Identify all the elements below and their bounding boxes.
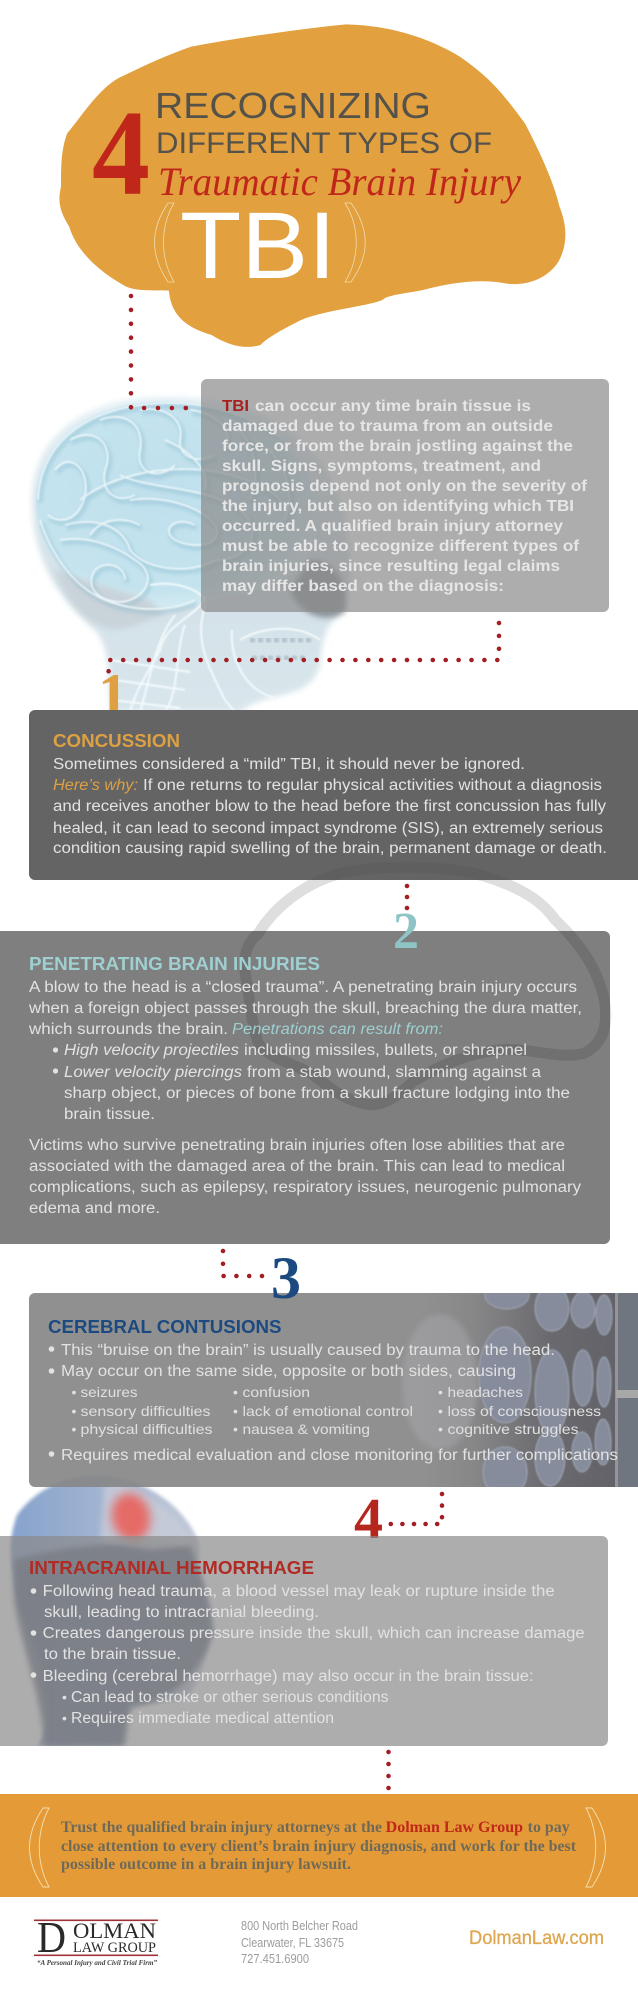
contusions bullet list: This “bruise on the brain” is usually caused by trauma to the head. [61,1342,555,1359]
title [92,85,521,299]
concussion body text: and receives another blow to the head before the first concussion has fully [53,798,606,815]
penetrating injuries body text: sharp object, or pieces of bone from a skull fracture lodging into the [64,1085,570,1102]
call to action text: Trust the qualified brain injury attorneys at the [61,1819,382,1836]
penetrating injuries body text [28,979,582,1217]
contact address [241,1919,358,1966]
intro paragraph: brain injuries, since resulting legal claims [222,558,560,575]
contact address: 800 North Belcher Road [241,1919,358,1933]
hemorrhage bullet list: Can lead to stroke or other serious conditions [71,1689,389,1706]
logo: Dolman Law Group: “A Personal Injury and Civil Trial Firm” [37,1958,157,1967]
concussion body text: If one returns to regular physical activities without a diagnosis [143,777,602,794]
hemorrhage bullet list: • [62,1689,67,1705]
numeral 4: 4 [354,1486,383,1551]
contusions bullet list: • [438,1403,443,1419]
penetrating injuries body text: Lower velocity piercings [64,1064,242,1081]
brain shaped title backdrop [59,24,565,347]
penetrating injuries body text: from a stab wound, slamming against a [247,1064,541,1081]
concussion body text [53,756,607,857]
hemorrhage bullet list: • [62,1710,67,1726]
call to action text: to pay [528,1819,570,1836]
call to action band [0,1794,638,1897]
concussion body text: Here’s why: [53,777,138,794]
concussion body text: condition causing rapid swelling of the brain, permanent damage or death. [53,840,607,857]
contact address: Clearwater, FL 33675 [241,1936,344,1950]
numeral 2: 2 [393,903,419,960]
numeral 3: 3 [271,1245,301,1311]
concussion body text: Sometimes considered a “mild” TBI, it should never be ignored. [53,756,525,773]
bracket left [30,1808,49,1887]
penetrating injuries body text: including missiles, bullets, or shrapnel [244,1042,527,1059]
penetrating injuries body text: edema and more. [29,1200,160,1217]
call to action text: possible outcome in a brain injury lawsuit. [61,1856,351,1873]
penetrating injuries body text: complications, such as epilepsy, respiratory issues, neurogenic pulmonary [29,1179,581,1196]
heading: concussion: CONCUSSION [53,731,180,751]
hemorrhage bullet list: Bleeding (cerebral hemorrhage) may also occur in the brain tissue: [43,1668,534,1685]
contusions bullet list: • [233,1421,238,1437]
contusions bullet list: • [72,1421,76,1437]
hemorrhage bullet list: skull, leading to intracranial bleeding. [44,1604,319,1621]
contusions bullet list: May occur on the same side, opposite or both sides, causing [61,1363,516,1380]
contusions bullet list: sensory difficulties [80,1403,210,1419]
hemorrhage bullet list: to the brain tissue. [44,1646,181,1663]
title: 4 [92,86,150,221]
hemorrhage bullet list: Creates dangerous pressure inside the skull, which can increase damage [43,1625,585,1642]
connector: section 4 to footer band [386,1752,391,1789]
panel: concussion [29,710,638,880]
logo: Dolman Law Group: D [37,1913,66,1962]
heading: penetrating brain injuries: PENETRATING BRAIN INJURIES [29,954,320,974]
hemorrhage bullet list: Requires immediate medical attention [71,1710,334,1727]
logo: Dolman Law Group: LAW GROUP [73,1940,156,1956]
concussion body text: healed, it can lead to second impact syndrome (SIS), an extremely serious [53,820,603,837]
intro paragraph: the injury, but also on identifying which TBI [222,498,574,515]
panel: intracranial hemorrhage [0,1536,608,1746]
contusions bullet list: seizures [80,1384,138,1400]
intro paragraph [222,398,588,595]
logo: Dolman Law Group [34,1913,158,1967]
heading: intracranial hemorrhage: INTRACRANIAL HEMORRHAGE [29,1558,314,1578]
contusions bullet list: lack of emotional control [242,1403,413,1419]
intro paragraph: may differ based on the diagnosis: [222,578,504,595]
penetrating injuries body text: when a foreign object passes through the skull, breaching the dura matter, [28,1000,582,1017]
connector: section 2 to section 3 [223,1251,268,1276]
contact address: 727.451.6900 [241,1952,309,1966]
intro paragraph: TBI [222,398,249,415]
contusions bullet list: cognitive struggles [448,1421,578,1437]
illustration: CT scan films [402,1293,638,1487]
penetrating injuries body text: Victims who survive penetrating brain injuries often lose abilities that are [29,1137,565,1154]
intro paragraph: prognosis depend not only on the severity of [222,478,588,495]
panel: intro [201,379,609,612]
illustration: brain outline behind section 2 [245,867,606,1105]
intro paragraph: damaged due to trauma from an outside [222,418,553,435]
contusions bullet list: confusion [242,1384,310,1400]
bracket right [586,1808,606,1887]
contusions bullet list: Requires medical evaluation and close monitoring for further complications [61,1447,618,1464]
connector: intro to section 1 [109,623,499,672]
heading: cerebral contusions: CEREBRAL CONTUSIONS [48,1317,282,1337]
contusions bullet list: • [438,1421,443,1437]
contusions bullet list: • [72,1403,76,1419]
title: RECOGNIZING [155,85,431,126]
penetrating injuries body text: brain tissue. [64,1106,155,1123]
illustration: head with red bleed [11,1475,213,1746]
logo: Dolman Law Group: OLMAN [73,1918,156,1943]
panel: cerebral contusions [29,1293,638,1487]
connector: section 3 to section 4 [388,1494,442,1524]
call to action text [61,1819,577,1873]
hemorrhage bullet list [31,1583,585,1727]
illustration: translucent skull and brain x-ray [32,397,350,712]
intro paragraph: skull. Signs, symptoms, treatment, and [222,458,541,475]
contusions bullet list: physical difficulties [80,1421,212,1437]
numeral 1: 1 [98,662,128,728]
website: DolmanLaw.com [469,1928,604,1949]
contusions bullet list [49,1342,618,1464]
contusions bullet list: loss of consciousness [448,1403,601,1419]
intro paragraph: occurred. A qualified brain injury attorney [222,518,563,535]
panel: penetrating brain injuries [0,931,610,1244]
contusions bullet list: nausea & vomiting [242,1421,370,1437]
hemorrhage bullet list: Following head trauma, a blood vessel may leak or rupture inside the [43,1583,555,1600]
title: TBI [180,193,336,299]
connector: title to intro [131,296,193,408]
penetrating injuries body text: A blow to the head is a “closed trauma”. A penetrating brain injury occurs [29,979,577,996]
contusions bullet list: • [72,1384,76,1400]
penetrating injuries body text: which surrounds the brain. [28,1021,228,1038]
contusions bullet list: • [233,1403,238,1419]
contusions bullet list: headaches [448,1384,523,1400]
connector: section 1 to section 2 [405,886,409,909]
title: DIFFERENT TYPES OF [156,127,492,160]
title: Traumatic Brain Injury [158,159,521,204]
penetrating injuries body text: associated with the damaged area of the brain. This can lead to medical [29,1158,565,1175]
penetrating injuries body text: High velocity projectiles [64,1042,239,1059]
call to action text: Dolman Law Group [386,1819,523,1836]
intro paragraph: can occur any time brain tissue is [255,398,531,415]
intro paragraph: must be able to recognize different types of [222,538,580,555]
contusions bullet list: • [233,1384,238,1400]
intro paragraph: force, or from the brain jostling against the [222,438,573,455]
contusions bullet list: • [438,1384,443,1400]
penetrating injuries body text: Penetrations can result from: [232,1021,443,1038]
call to action text: close attention to every client’s brain injury diagnosis, and work for the best [61,1838,577,1855]
